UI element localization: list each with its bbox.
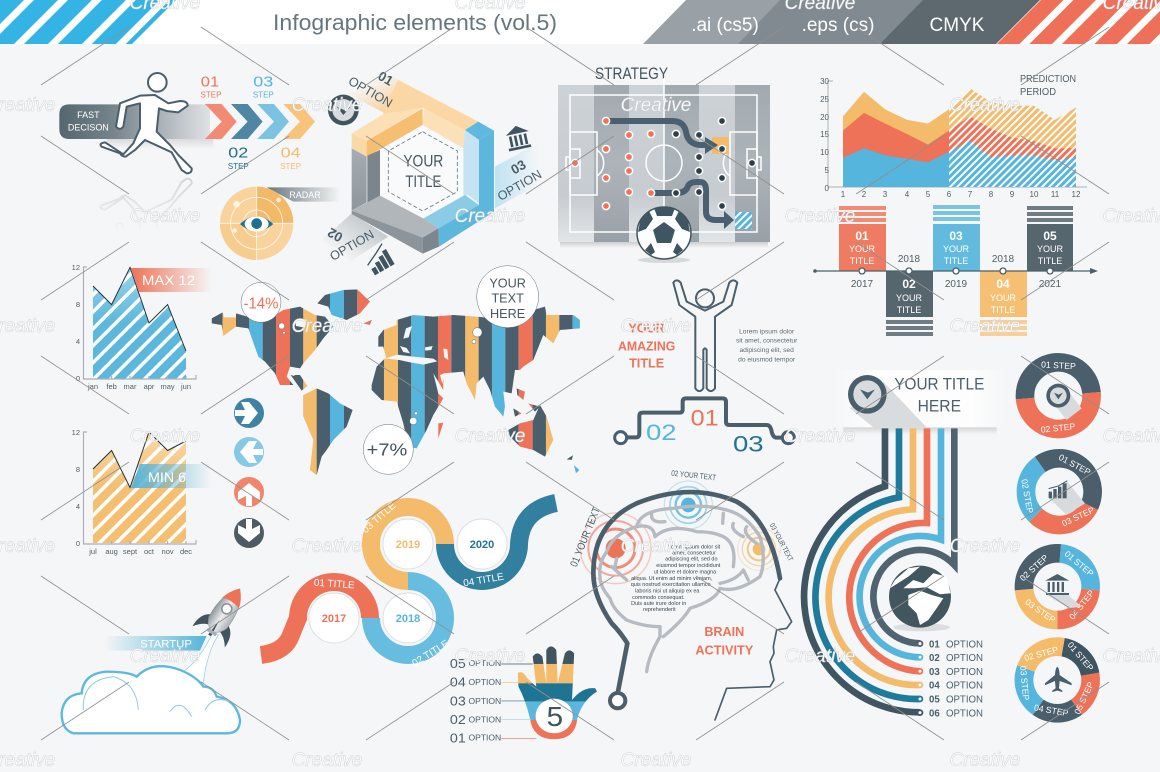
icon: football [637,206,691,263]
bubble: your text here [472,266,539,344]
watermark overlay: Creative [785,646,855,667]
watermark overlay: Creative [130,646,200,667]
title here banner: HERE [918,397,961,416]
bubble: your text here: HERE [490,307,525,321]
runner step arrow: DECISON [68,122,109,132]
line chart: min 6: sept [123,547,138,556]
line end dots [917,640,923,716]
title here banner [804,359,1106,726]
chevrons [205,104,315,139]
watermark overlay: Creative [292,95,362,116]
y axis labels: 0 [825,184,830,193]
option labels: OPTION [946,667,983,678]
step ring: growth: 03 STEP [1060,505,1096,528]
brain paragraph: aliqua. Ut enim ad minim veniam, [631,576,713,582]
icon: right arrow [234,398,264,428]
brain labels [568,469,795,569]
watermark overlay: Creative [785,426,855,447]
column 05: YOUR [1037,244,1063,254]
axis labels [72,263,80,383]
y axis labels: 25 [820,95,830,104]
step labels: STEP [228,162,249,171]
watermark overlay: Creative [130,426,200,447]
winner podium: 02 [646,420,677,445]
column 02: 02 [902,277,916,291]
watermark overlay: Creative [950,95,1020,116]
x axis labels: 1 [841,190,846,199]
format labels: .ai (cs5) [691,15,759,36]
step labels: 04 [281,145,301,161]
brain paragraph: Lorem ipsum dolor sit [668,544,721,550]
y axis labels [820,77,830,193]
step ring: plane: 03 STEP [1018,665,1031,701]
years: 2021 [1039,279,1062,290]
step ring: plane: 01 STEP [1066,640,1096,673]
years: 2019 [396,539,420,551]
light blue segment [371,581,445,655]
column 02: YOUR [896,293,922,303]
years: 2020 [470,539,494,551]
option 01 label: 01 [375,68,396,89]
brain activity [568,469,795,720]
line chart: max 12: apr [144,382,155,391]
watermark overlay: Creative [130,206,200,227]
axis labels: 12 [72,263,80,272]
runner step arrow: FAST [77,110,100,120]
column 03 [933,205,980,271]
option rows: OPTION [468,678,501,687]
gray faces [352,148,367,211]
step ring: plane: 04 STEP [1033,702,1069,718]
line chart: min 6 [72,428,212,556]
pulse: red [580,513,651,584]
step ring: bank: 04 STEP [1067,588,1096,622]
lorem text [736,328,798,363]
option labels: OPTION [946,653,983,664]
bubble: -14% [241,282,285,334]
bubble: your text here: TEXT [491,292,524,306]
option 03 label: OPTION [495,167,544,204]
step labels: STEP [201,91,221,100]
radar label [267,187,340,202]
runner figure [101,73,192,173]
line chart: min 6: dec [180,547,192,556]
cloud [62,666,240,733]
runner step arrow [59,74,315,171]
option labels [929,639,983,720]
step labels: 01 [201,74,219,90]
brain outline [600,506,763,672]
step ring: clock [1022,359,1094,435]
predicted areas [949,88,1076,187]
line chart: max 12: jun [180,382,191,391]
amazing title: AMAZING [618,339,675,353]
option rows: 03 [450,693,466,709]
bubble: +7% [363,412,418,474]
option rows: 02 [450,711,466,727]
option labels: OPTION [946,695,983,706]
option labels: OPTION [946,681,983,692]
line chart: min 6: nov [162,547,174,556]
brain paragraph: quis nostrud exercitation ullamco [631,582,711,588]
option 03 label: 03 [508,157,529,177]
watermark overlay: Creative [292,750,362,771]
axis labels: 8 [76,300,80,309]
watermark overlay: Creative [950,750,1020,771]
blue faces [465,122,494,140]
startup rocket and cloud: STARTUP [140,639,192,651]
rocket [192,578,256,647]
main title: Infographic elements (vol.5) [273,10,557,35]
axis labels: 0 [76,539,80,548]
x axis labels: 4 [905,190,910,199]
segment titles: 04 TITLE [462,572,505,590]
map stripes [210,287,586,480]
lorem text: do eiusmod tempor [738,356,796,363]
brain paragraph: Duis aute irure dolor in [631,601,686,607]
smoke trail [183,632,218,683]
column 05 [1027,206,1073,271]
hexagon diagram: YOUR [403,152,443,171]
years [851,254,1062,290]
years [322,539,494,625]
world map [210,266,586,480]
area chart: prediction period: PERIOD [1020,87,1056,98]
x axis labels: 5 [926,190,931,199]
column 05: TITLE [1038,256,1062,266]
amazing title: YOUR [628,322,665,336]
segment titles: 01 TITLE [313,578,355,591]
startup ribbon [103,636,207,651]
option labels: 02 [929,653,940,664]
watermark overlay: Creative [621,750,691,771]
icon: up arrow [234,477,264,507]
option 02 label: OPTION [327,227,377,264]
watermark overlay: Creative [455,206,525,227]
format labels: CMYK [930,15,985,36]
option rows: 05 [450,655,466,671]
column 03: 03 [949,229,963,243]
column 04: TITLE [991,305,1015,315]
axis labels: 0 [76,374,80,383]
fast decision bar [59,104,210,139]
bubble: -14%: -14% [243,295,278,312]
step ring: plane [1011,634,1104,726]
orange top faces [383,80,478,130]
step labels: STEP [280,162,301,171]
option rows: 04 [450,674,466,690]
brain paragraph: laboris nisi ut aliquip ex ea [635,589,700,595]
option rows: OPTION [468,734,501,743]
option labels: 03 [929,667,940,678]
years: 2018 [992,254,1015,265]
line chart: min 6: oct [144,547,155,556]
brain activity title: ACTIVITY [695,643,753,658]
curved option lines [804,428,954,712]
column 04 [980,271,1027,336]
x axis labels: 10 [1030,190,1039,199]
line chart: max 12: may [161,382,175,391]
watermark overlay: Creative [621,536,691,557]
watermark overlay: Creative [455,426,525,447]
brain labels: 01 YOUR TEXT [568,505,603,569]
hand stripes [518,646,597,740]
years: 2018 [898,254,921,265]
option tags [347,73,423,113]
watermark overlay: Creative [785,206,855,227]
step ring: plane: 05 STEP [1072,680,1096,716]
brain paragraph [631,544,721,613]
step ring: bank: 02 STEP [1018,552,1050,583]
hexagon diagram: TITLE [405,172,441,191]
y axis labels: 20 [820,113,830,122]
players [571,117,655,210]
step labels: 02 [228,145,248,161]
arrow buttons [234,398,264,548]
icon: left arrow [234,437,264,467]
step ring: growth: 01 STEP [1057,452,1093,477]
axis labels: 12 [72,428,80,437]
step ring: plane: 02 STEP [1023,644,1059,663]
years: 2017 [851,279,874,290]
option labels: 01 [929,639,940,650]
step labels: 03 [253,74,273,90]
red segment [261,582,370,655]
line chart: min 6: aug [105,547,118,556]
x axis labels: 3 [883,190,888,199]
step labels [201,74,301,171]
seas [290,319,448,384]
column 03: TITLE [944,256,968,266]
icon: down arrow [234,518,264,548]
brain activity title [695,624,753,658]
y axis labels: 5 [825,166,830,175]
year discs [309,519,507,643]
icon: clock [848,375,887,414]
column 02: TITLE [897,305,921,315]
column 01: YOUR [849,244,875,254]
pulse: blue [664,481,712,529]
option labels: OPTION [946,639,983,650]
brain paragraph: eiusmod tempor incididunt [656,563,721,569]
option rows: 01 [450,730,466,745]
brain paragraph: reprehenderit [643,607,676,613]
x axis labels: 12 [1072,190,1081,199]
winner podium [615,280,798,456]
option labels: 04 [929,681,940,692]
segment titles: 02 TITLE [410,638,451,669]
step ring: bank: 03 STEP [1023,597,1058,625]
x axis labels: 8 [989,190,994,199]
axes [828,81,1087,187]
runner reflection [101,179,192,257]
radar: RADAR [289,190,321,200]
gray format banners [643,0,1040,44]
max ribbon [131,268,212,292]
icon: growth bars [362,243,395,276]
brain labels: 03 YOUR TEXT [768,522,795,563]
podium numbers: 01 [691,405,719,430]
header band [0,0,1160,44]
step ring: bank: 01 STEP [1063,549,1096,579]
y axis labels: 30 [820,77,830,86]
x axis labels [841,190,1081,199]
option rows: OPTION [468,697,501,706]
column 05: 05 [1043,229,1057,243]
min ribbon [131,464,212,488]
actual areas [843,92,949,187]
red header stripes [994,0,1160,44]
watermark overlay: Creative [621,95,691,116]
number disc [536,699,573,733]
icon: eye [240,216,273,232]
option rows: OPTION [468,659,501,668]
hand option diagram: 5 [547,702,563,733]
orange segment [371,507,445,581]
lorem text: adipiscing elit, sed [739,347,794,354]
centre hexagon [380,125,463,218]
axis labels: 4 [76,337,80,346]
icon: bank [504,124,532,152]
line chart: max 12: feb [106,382,117,391]
option rows: OPTION [468,716,501,724]
brain paragraph: commodo consequat. [632,595,685,601]
segment titles: 03 TITLE [360,500,398,536]
bubble: your text here: YOUR [489,276,526,290]
step ring: growth: 02 STEP [1019,478,1035,514]
x axis labels: 9 [1010,190,1015,199]
years: 2018 [396,613,420,625]
radar [220,187,340,260]
brain paragraph: adipiscing elit, sed do [665,556,718,562]
podium steps [615,398,794,444]
watermark overlay: Creative [950,536,1020,557]
lorem text: sit amet, consectetur [736,338,798,345]
snake timeline [261,500,556,669]
winner podium: 03 [733,431,764,456]
x axis labels: 2 [862,190,867,199]
option labels: OPTION [946,709,983,720]
line chart: max 12: jan [87,382,98,391]
watermark overlay: Creative [950,316,1020,337]
lorem text: Lorem ipsum dolor [739,328,795,335]
target squares [712,137,729,154]
format labels: .eps (cs) [802,15,874,36]
line chart: max 12: MAX 12 [142,272,195,288]
column 03: YOUR [943,244,969,254]
play arrows [608,121,726,220]
step ring: clock: 02 STEP [1040,421,1076,435]
step ring: bank [1018,549,1096,625]
startup rocket and cloud [62,578,256,733]
column 01: 01 [855,229,869,243]
step ring: growth [1012,445,1106,539]
format labels [691,15,985,36]
brain paragraph: ut labore et dolore magna [654,569,717,575]
watermark overlay: Creative [455,646,525,667]
amazing title: TITLE [629,356,664,370]
y axis labels: 10 [820,148,830,157]
amazing title [618,322,675,370]
brain labels: 02 YOUR TEXT [671,469,717,482]
column 04: YOUR [990,293,1016,303]
dark blue segment [445,503,556,581]
column 02 [886,271,933,336]
column 04: 04 [996,277,1010,291]
y axis labels: 15 [820,130,830,139]
strategy title: STRATEGY [595,65,668,83]
step ring: clock: 01 STEP [1041,359,1076,371]
option labels: 06 [929,709,940,720]
line chart: min 6: MIN 6 [148,469,186,485]
column 01: TITLE [850,256,874,266]
x axis labels: 7 [968,190,973,199]
brain activity title: BRAIN [704,624,744,639]
x axis labels: 11 [1051,190,1060,199]
line chart: max 12: mar [124,382,137,391]
title here banner: YOUR TITLE [894,374,984,393]
figure [673,280,737,391]
hand option diagram [450,643,601,745]
hexagon diagram [320,68,544,276]
option 02 label: 02 [325,225,345,245]
football strategy pitch [558,78,770,263]
bubble: +7%: +7% [367,439,407,459]
option 01 label: OPTION [346,74,395,110]
timeline [813,205,1098,336]
years: 2019 [945,279,968,290]
option rows [450,655,536,745]
axis labels: 8 [76,465,80,474]
blue header stripes [0,0,176,44]
area chart: prediction period [820,74,1087,199]
option labels: 05 [929,695,940,706]
head outline [593,492,792,720]
axis labels [72,428,80,548]
prediction label: PREDICTION [1020,74,1076,85]
x axis labels: 6 [947,190,952,199]
segment titles [313,500,505,669]
line chart: max 12 [72,263,212,391]
years: 2017 [322,613,346,625]
watermark overlay: Creative [621,316,691,337]
brain paragraph: amet, consectetur [672,550,716,556]
pulse: orange [738,528,780,570]
timeline axis [813,268,1098,274]
axis labels: 4 [76,502,80,511]
icon: clock [328,95,359,125]
watermark overlay: Creative [292,316,362,337]
icon: globe [889,566,951,631]
step labels: STEP [253,91,274,100]
watermark overlay: Creative [292,536,362,557]
line chart: min 6: jul [88,547,97,556]
column 01 [839,206,886,271]
